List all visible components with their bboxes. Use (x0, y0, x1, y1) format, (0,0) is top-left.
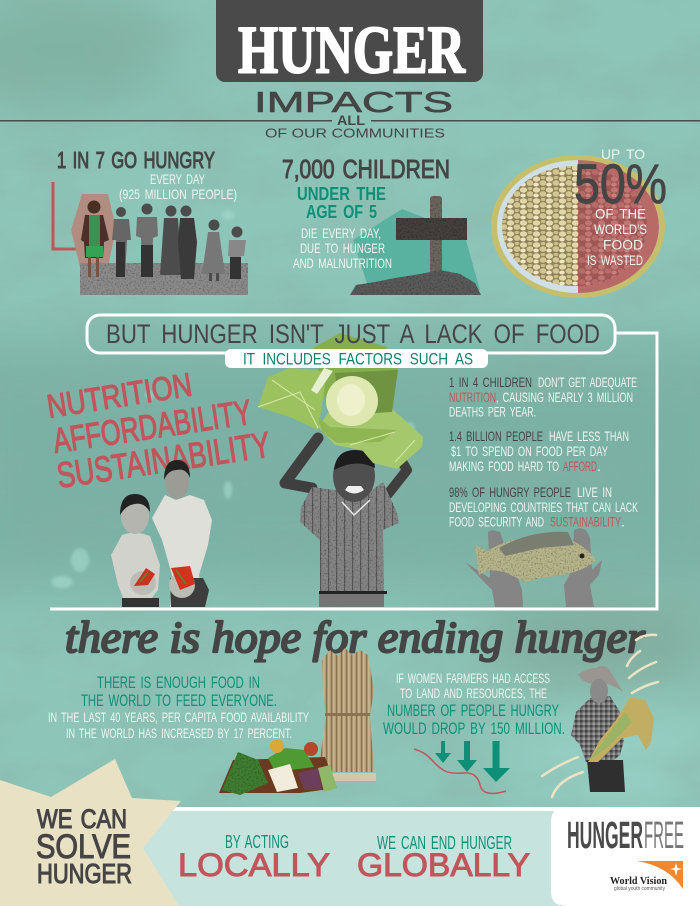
factor words: NUTRITION (44, 366, 194, 425)
teal emphasis: WOULD DROP BY 150 MILLION. (383, 719, 565, 738)
photo: woman farmer with rice (571, 666, 654, 792)
factor words (44, 366, 273, 496)
text: we can end hunger: WE CAN END HUNGER (377, 833, 512, 853)
fact: affordability: AFFORD (563, 458, 597, 474)
fact: nutrition: DEATHS PER YEAR. (449, 404, 536, 420)
fact: affordability: MAKING FOOD HARD TO (449, 458, 559, 474)
text: die every day: AND MALNUTRITION (293, 255, 392, 271)
fact: affordability: 1.4 BILLION PEOPLE (449, 428, 543, 444)
red bracket (53, 182, 85, 249)
photo: boy with cabbage on head (258, 333, 423, 607)
girl (111, 494, 160, 607)
white detail: IN THE WORLD HAS INCREASED BY 17 PERCENT. (66, 725, 292, 741)
icon: declining red line (414, 749, 506, 793)
photo: wheat bundle (318, 648, 376, 781)
heading: there is hope for ending hunger: there is hope for ending hunger (65, 613, 646, 662)
text: of the world's food is wasted: WORLD'S (594, 221, 647, 237)
stat: 50% of food wasted (491, 146, 667, 298)
number: 50%: 50% (574, 152, 667, 215)
starburst: we can solve hunger: SOLVE (36, 828, 131, 866)
subtitle: impacts all of our communities: OF OUR COMMUNITIES (265, 126, 445, 140)
fact: sustainability: LIVE IN (577, 484, 612, 500)
highlight hexagon (71, 194, 116, 267)
face (590, 679, 608, 703)
photo: vegetables (219, 739, 337, 795)
heading text: but hunger isn't just a lack of food: BUT HUNGER ISN'T JUST A LACK OF FOOD (106, 319, 600, 349)
frame lines around factors section (50, 333, 657, 609)
fact: sustainability: SUSTAINABILITY (550, 514, 621, 530)
fact: affordability: HAVE LESS THAN (549, 428, 629, 444)
logo panel (551, 807, 700, 906)
fact: sustainability (449, 484, 638, 530)
shirt collar (342, 500, 370, 515)
fact: nutrition: NUTRITION (449, 389, 496, 405)
teal emphasis (383, 701, 565, 738)
fact: nutrition: 1 IN 4 CHILDREN (449, 374, 532, 390)
title banner (216, 0, 483, 88)
hands with red peppers (130, 566, 195, 598)
child in colour (81, 200, 109, 277)
photo: group of children (80, 200, 248, 295)
icon: wooden cross on mound (350, 196, 481, 295)
photo: hands holding fish (465, 528, 602, 607)
teal lead: THERE IS ENOUGH FOOD IN (97, 673, 260, 692)
logo: world vision (610, 861, 683, 892)
head (333, 450, 375, 502)
fact: nutrition: DON'T GET ADEQUATE (538, 374, 637, 390)
starburst: we can solve hunger: HUNGER (37, 858, 132, 889)
arms (285, 438, 318, 488)
fact: sustainability: FOOD SECURITY AND (449, 514, 544, 530)
starburst: we can solve hunger (0, 759, 181, 906)
heading frame (87, 315, 615, 353)
heading: 7,000 children: 7,000 CHILDREN (282, 154, 450, 184)
factor words: AFFORDABILITY (50, 393, 254, 461)
white lead (396, 670, 550, 701)
children in greyscale (112, 204, 246, 281)
text: up to: UP TO (601, 146, 645, 162)
subtitle: impacts all of our communities: IMPACTS (254, 87, 453, 119)
pill: it includes factors such as: IT INCLUDES FACTORS SUCH AS (243, 350, 473, 368)
photo: woman and girl holding peppers (111, 460, 212, 607)
hat (578, 666, 623, 692)
text: die every day (293, 225, 392, 271)
subtitle: impacts all of our communities: ALL (337, 113, 365, 128)
white lead: IF WOMEN FARMERS HAD ACCESS (396, 670, 550, 686)
fact: sustainability: . (621, 514, 625, 530)
text: of the world's food is wasted: IS WASTED (587, 252, 643, 268)
teal lead (81, 673, 277, 710)
teal emphasis: NUMBER OF PEOPLE HUNGRY (387, 701, 559, 720)
text: die every day: DIE EVERY DAY, (301, 225, 381, 241)
starburst: we can solve hunger: WE CAN (37, 804, 127, 834)
decorative cream dashes (542, 635, 658, 797)
bottom band (140, 807, 570, 906)
stat: 1 in 7 go hungry (53, 147, 248, 295)
shirt (300, 482, 399, 592)
text: by acting: BY ACTING (225, 832, 289, 852)
title: HUNGER: HUNGER (238, 12, 466, 88)
logo: world vision: global youth community (614, 886, 665, 892)
subheading: under the age of 5: AGE OF 5 (306, 202, 377, 222)
rice bundle (588, 697, 654, 762)
stat: 7,000 children (282, 154, 481, 295)
woman (152, 460, 212, 607)
text: die every day: DUE TO HUNGER (300, 240, 385, 256)
text: enough food (48, 673, 309, 741)
fact: affordability (449, 428, 629, 474)
white detail: IN THE LAST 40 YEARS, PER CAPITA FOOD AVAILABILITY (48, 709, 309, 725)
heading: 1 in 7: 1 IN 7 GO HUNGRY (57, 147, 215, 173)
text: every day: EVERY DAY (150, 171, 205, 187)
factor words: SUSTAINABILITY (54, 424, 273, 496)
icon: bowl of beans half tinted (491, 155, 665, 298)
cabbage (258, 333, 423, 469)
white lead: TO LAND AND RESOURCES, THE (400, 685, 547, 701)
text: every day (119, 171, 237, 202)
text: of the world's food is wasted (587, 206, 647, 268)
subtitle: impacts all of our communities (0, 87, 700, 140)
fact: nutrition (449, 374, 637, 420)
icons: down arrows (435, 741, 510, 782)
teal lead: THE WORLD TO FEED EVERYONE. (81, 691, 277, 710)
fact: sustainability: 98% OF HUNGRY PEOPLE (449, 484, 571, 500)
fact: affordability: . (597, 458, 601, 474)
text: women farmers (383, 670, 565, 738)
subheading: under the age of 5: UNDER THE (297, 184, 386, 204)
text: every day: (925 MILLION PEOPLE) (119, 186, 237, 202)
logo: world vision: World Vision (610, 875, 667, 887)
text: of the world's food is wasted: OF THE (595, 206, 646, 222)
fact: affordability: $1 TO SPEND ON FOOD PER DAY (451, 443, 608, 459)
shape behind cross (353, 209, 480, 293)
shorts (319, 594, 384, 607)
text: factor facts (449, 374, 638, 530)
text: globally: GLOBALLY (357, 847, 530, 883)
body (571, 696, 624, 762)
white detail (48, 709, 309, 741)
subheading: under the age of 5 (297, 184, 386, 222)
text: locally: LOCALLY (178, 847, 330, 883)
text: of the world's food is wasted: FOOD (603, 236, 643, 252)
